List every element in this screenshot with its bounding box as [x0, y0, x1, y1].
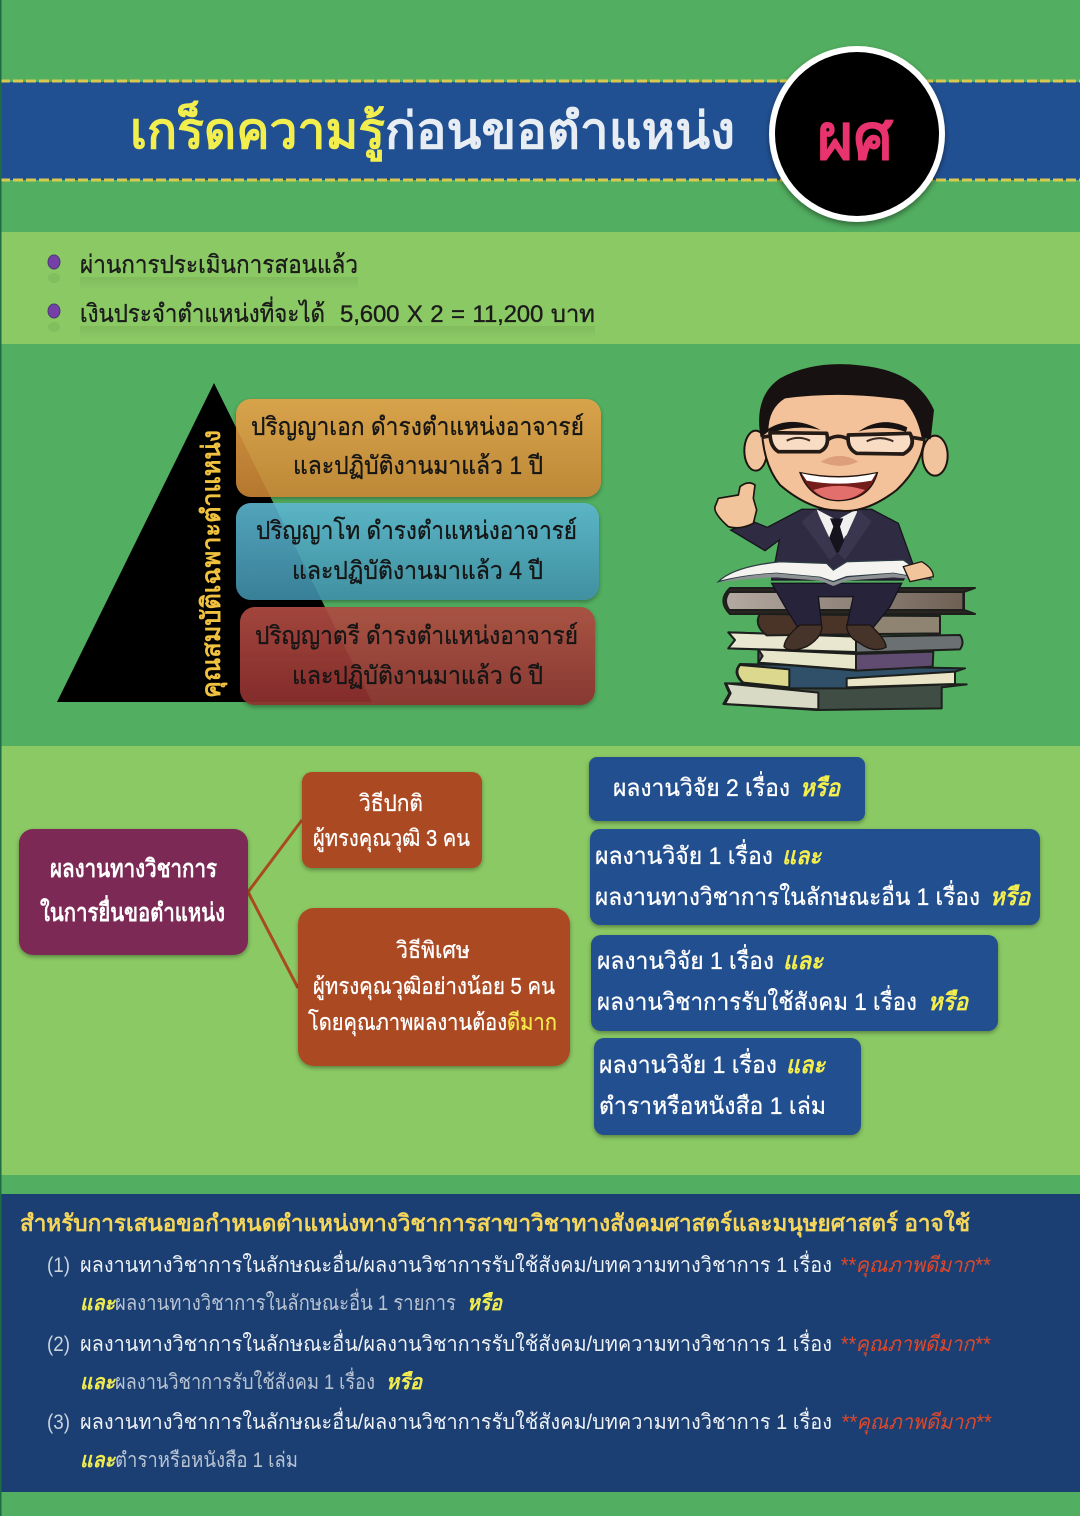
panel: qualification pyramid — [57, 383, 601, 705]
item 1: ผลงานทางวิชาการในลักษณะอื่น 1 รายการ — [115, 1288, 456, 1315]
box: doctorate: และปฏิบัติงานมาแล้ว 1 ปี — [293, 452, 543, 480]
box: academic work for application: ในการยื่นขอตำแหน่ง — [40, 895, 225, 927]
box: special method: ผู้ทรงคุณวุฒิอย่างน้อย 5 คน — [313, 973, 555, 1000]
box: option 4: ตำราหรือหนังสือ 1 เล่ม — [599, 1093, 826, 1120]
item 3 — [47, 1407, 992, 1472]
legs and shoes — [772, 583, 902, 628]
box: option 4 — [594, 1038, 861, 1135]
box: special method — [298, 908, 570, 1066]
box: option 1: ผลงานวิจัย 2 เรื่อง — [613, 771, 790, 802]
smiling eyes — [787, 438, 893, 441]
box: option 3: หรือ — [928, 989, 969, 1016]
item 2: (2) — [47, 1333, 70, 1356]
box: bachelor — [240, 607, 595, 705]
box: option 3: และ — [783, 948, 825, 975]
box: master — [236, 503, 599, 600]
box: option 2: หรือ — [990, 884, 1031, 911]
item 3: ตำราหรือหนังสือ 1 เล่ม — [115, 1449, 298, 1472]
bullet two: 5,600 X 2 = 11,200 บาท — [340, 301, 595, 328]
box: option 2: ผลงานวิจัย 1 เรื่อง — [595, 839, 773, 870]
box: option 4: และ — [786, 1052, 827, 1079]
box: option 3 — [591, 935, 998, 1031]
note heading: สำหรับการเสนอขอกำหนดตำแหน่งทางวิชาการสาขาวิชาทางสังคมศาสตร์และมนุษยศาสตร์ อาจใช้ — [20, 1209, 970, 1238]
hair — [759, 364, 934, 439]
ears — [744, 431, 767, 471]
panel: social sciences and humanities note — [0, 1194, 1080, 1492]
bullet one — [48, 251, 358, 290]
item 3: และ — [80, 1449, 117, 1472]
item 2: หรือ — [386, 1370, 423, 1394]
item 2: **คุณภาพดีมาก** — [840, 1333, 991, 1357]
box: option 2: ผลงานทางวิชาการในลักษณะอื่น 1 เรื่อง — [595, 880, 980, 911]
box: academic work for application — [19, 829, 248, 955]
box: bachelor: และปฏิบัติงานมาแล้ว 6 ปี — [292, 662, 543, 690]
box: option 1: หรือ — [800, 775, 841, 802]
box: master: ปริญญาโท ดำรงตำแหน่งอาจารย์ — [256, 516, 577, 545]
item 1: **คุณภาพดีมาก** — [840, 1254, 991, 1278]
item 1 — [47, 1250, 991, 1315]
bullet one: ผ่านการประเมินการสอนแล้ว — [80, 251, 358, 279]
item 1: และ — [80, 1292, 117, 1315]
badge: ผศ — [769, 46, 945, 222]
box: option 4: ผลงานวิจัย 1 เรื่อง — [599, 1048, 777, 1079]
title: ก่อนขอตำแหน่ง — [385, 103, 735, 159]
box: option 3: ผลงานวิชาการรับใช้สังคม 1 เรื่อง — [597, 985, 917, 1016]
badge: ผศ: ผศ — [817, 101, 894, 173]
glasses — [762, 433, 923, 454]
face — [762, 383, 925, 511]
item 2 — [47, 1329, 991, 1394]
box: normal method — [302, 772, 482, 868]
item 2: ผลงานทางวิชาการในลักษณะอื่น/ผลงานวิชาการรับใช้สังคม/บทความทางวิชาการ 1 เรื่อง — [80, 1329, 832, 1356]
thumbs-up hand — [715, 483, 757, 528]
item 3: ผลงานทางวิชาการในลักษณะอื่น/ผลงานวิชาการรับใช้สังคม/บทความทางวิชาการ 1 เรื่อง — [80, 1407, 832, 1434]
item 2: และ — [80, 1371, 117, 1394]
box: option 2: และ — [782, 843, 823, 870]
header banner — [0, 81, 1080, 180]
box: special method: วิธีพิเศษ — [396, 937, 470, 963]
item 1: หรือ — [467, 1291, 503, 1315]
book stack — [723, 588, 975, 710]
box: master: และปฏิบัติงานมาแล้ว 4 ปี — [292, 557, 543, 585]
box: option 1 — [589, 757, 865, 821]
nose — [821, 456, 858, 466]
vertical pyramid label: คุณสมบัติเฉพาะตำแหน่ง — [196, 430, 228, 698]
box: option 2 — [590, 829, 1040, 925]
box: special method: ดีมาก — [507, 1009, 557, 1035]
panel: academic work — [0, 746, 1080, 1175]
item 3: (3) — [47, 1411, 70, 1434]
box: special method: โดยคุณภาพผลงานต้อง — [308, 1009, 507, 1036]
open book — [718, 560, 932, 582]
box: academic work for application: ผลงานทางวิชาการ — [50, 855, 217, 883]
mouth — [800, 473, 877, 501]
box: doctorate — [236, 399, 601, 497]
title — [130, 100, 735, 162]
box: normal method: วิธีปกติ — [359, 790, 423, 816]
box: doctorate: ปริญญาเอก ดำรงตำแหน่งอาจารย์ — [251, 413, 584, 441]
icon: cartoon lecturer sitting on books — [715, 364, 975, 710]
title: เกร็ดความรู้ — [130, 100, 385, 162]
eyebrows — [767, 422, 821, 433]
item 2: ผลงานวิชาการรับใช้สังคม 1 เรื่อง — [115, 1367, 375, 1394]
item 1: ผลงานทางวิชาการในลักษณะอื่น/ผลงานวิชาการรับใช้สังคม/บทความทางวิชาการ 1 เรื่อง — [80, 1250, 832, 1277]
connector lines — [248, 820, 302, 988]
item 3: **คุณภาพดีมาก** — [841, 1411, 992, 1435]
box: bachelor: ปริญญาตรี ดำรงตำแหน่งอาจารย์ — [255, 622, 578, 650]
item 1: (1) — [47, 1254, 70, 1277]
panel: basic conditions — [0, 232, 1080, 344]
box: option 3: ผลงานวิจัย 1 เรื่อง — [597, 944, 774, 975]
box: normal method: ผู้ทรงคุณวุฒิ 3 คน — [313, 825, 470, 852]
suit torso and arm — [731, 509, 913, 580]
bullet two — [48, 296, 595, 339]
bullet two: เงินประจำตำแหน่งที่จะได้ — [80, 296, 325, 328]
pyramid triangle — [57, 383, 372, 702]
